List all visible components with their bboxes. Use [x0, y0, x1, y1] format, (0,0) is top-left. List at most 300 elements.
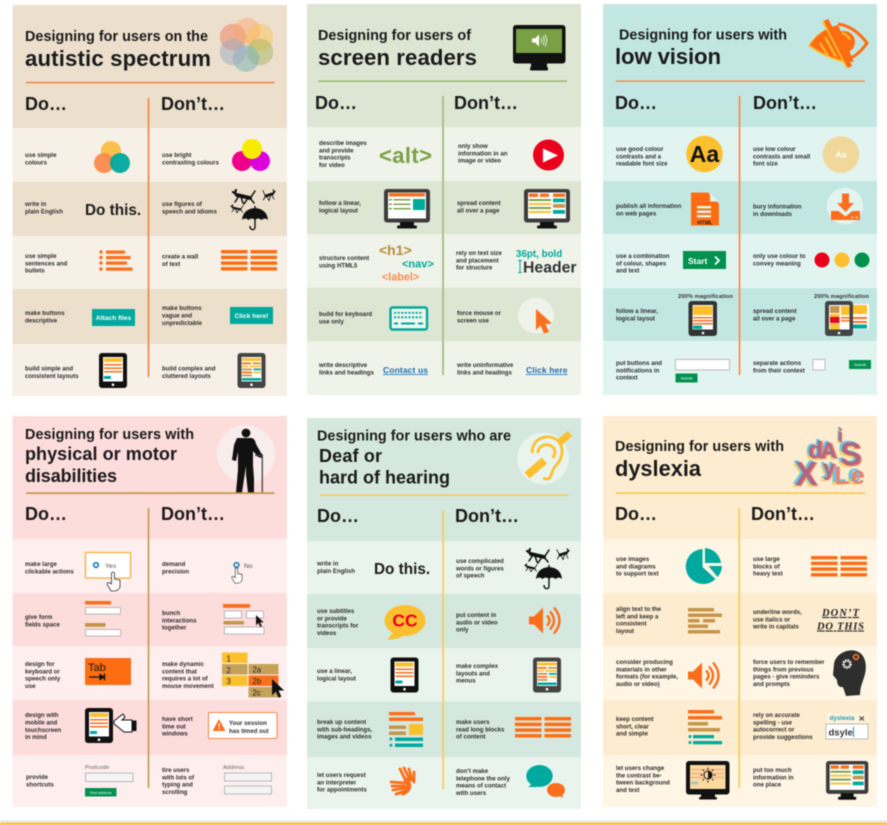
- icon: cluttered monitor: [826, 761, 868, 800]
- icon: wall of text: [515, 717, 571, 738]
- row text: long blocks: make users: [456, 719, 490, 726]
- heading: physical or motor disabilities: physical or motor: [25, 444, 177, 464]
- row text: audio or video only: only: [456, 627, 469, 634]
- row text: other formats: consider producing: [616, 659, 673, 666]
- row text: large blocks: heavy text: [753, 571, 783, 578]
- row text: structure content: structure content: [319, 255, 369, 262]
- row text: build for keyboard: use only: [319, 318, 344, 325]
- row text: change contrast: the contrast be-: [616, 772, 662, 779]
- row text: low contrast: contrasts and small: [753, 153, 811, 160]
- row text: rely on text size: and placement: [456, 257, 499, 264]
- row text: only colour: convey meaning: [753, 260, 801, 267]
- icon: jumbled dyslexia letters: A: [822, 438, 839, 464]
- button: attach files: [92, 309, 135, 326]
- row text: complicated words: words or figures: [455, 565, 504, 572]
- icon: low contrast Aa: [823, 136, 859, 173]
- row text: complex layouts: make complex: [456, 663, 499, 670]
- row text: break up content: with sub-headings,: [316, 726, 372, 733]
- icon: closed caption bubble: CC: [392, 610, 418, 630]
- row text: spread content: spread content: [753, 308, 797, 315]
- heading: deaf or hard of hearing: Deaf or: [319, 446, 382, 466]
- icon: jumbled dyslexia letters: S: [840, 436, 861, 472]
- row text: rely on accurate spelling: provide suggestions: [753, 734, 813, 741]
- row text: follow linear layout: follow a linear,: [616, 308, 658, 315]
- icon: cluttered tablet: [238, 353, 266, 388]
- row text: short timeouts: have short: [162, 716, 193, 723]
- row text: other formats: audio or video): [616, 681, 660, 688]
- row text: interpreter: an interpreter: [317, 779, 357, 786]
- icon: wall of text: [221, 250, 277, 270]
- example: alt tag: <alt>: [379, 143, 432, 168]
- row text: change contrast: and text: [616, 787, 639, 794]
- row text: keyboard or speech: design for: [25, 661, 55, 668]
- row text: mobile and touchscreen: design with: [25, 712, 59, 719]
- row text: images and diagrams: to support text: [616, 571, 659, 578]
- row text: break up content: images and videos: [317, 734, 372, 741]
- icon: html document: [691, 192, 719, 226]
- heading: dyslexia: [615, 439, 784, 481]
- row text: keep content short: and simple: [616, 731, 648, 738]
- row text: too much information: one place: [753, 782, 782, 789]
- icon: jumbled dyslexia letters: y: [824, 456, 837, 481]
- row text: rely on accurate spelling: spelling - use: [753, 719, 793, 726]
- row text: only show information: information in an: [458, 150, 508, 157]
- row text: complex layouts: menus: [456, 678, 476, 685]
- row text: underline italics capitals: use italics or: [753, 616, 791, 623]
- icon: jumbled dyslexia letters: A: [818, 439, 835, 465]
- icon: cluttered tablet: [533, 658, 561, 692]
- menu: nested fly-out: 3: [226, 677, 231, 686]
- heading: do: Do…: [615, 504, 657, 524]
- heading: autistic spectrum: Designing for users on the: [25, 29, 208, 45]
- row text: mobile and touchscreen: touchscreen: [25, 727, 62, 734]
- row text: build for keyboard: build for keyboard: [319, 311, 372, 318]
- icon: bright colour circles: [232, 139, 270, 171]
- row text: long blocks: read long blocks: [456, 726, 505, 733]
- row text: make buttons vague: vague and: [162, 312, 192, 320]
- row text: force users to remember: pages - give reminders: [753, 674, 820, 681]
- row text: spread content: spread content: [457, 200, 501, 207]
- row text: keep content short: keep content: [616, 716, 654, 723]
- row text: subtitles: videos: [317, 630, 337, 637]
- icon: head with gears: [833, 650, 866, 696]
- example: don't do this: DO THIS: [816, 622, 864, 632]
- icon: jumbled dyslexia letters: [792, 424, 865, 495]
- button: start: Start: [688, 256, 708, 266]
- row text: publish on web pages: publish all information: [616, 203, 682, 210]
- row text: good contrast: readable font size: [616, 161, 668, 168]
- heading: don't: Don’t…: [161, 504, 225, 524]
- icon: jumbled dyslexia letters: y: [823, 457, 835, 480]
- row text: short timeouts: windows: [161, 731, 188, 738]
- example: do this: Do this.: [85, 202, 141, 219]
- icon: jumbled dyslexia letters: e: [851, 462, 865, 490]
- icon: left-aligned lines: [688, 608, 722, 634]
- icon: jumbled dyslexia letters: S: [841, 436, 863, 473]
- row text: buttons in context: notifications in: [616, 367, 660, 374]
- row text: write uninformative links: write uninformative: [456, 362, 514, 369]
- row text: use simple sentences and bullets: bullets: [25, 268, 45, 275]
- row text: interpreter: let users request: [317, 772, 366, 779]
- row text: large clickable actions: clickable actions: [25, 568, 74, 575]
- row text: other formats: formats (for example,: [616, 674, 678, 681]
- row text: build simple layouts: build simple and: [25, 366, 73, 372]
- panel: deaf or hard of hearing: [307, 418, 581, 809]
- row text: only show information: image or video: [458, 158, 501, 165]
- heading: deaf or hard of hearing: Designing for users who are: [317, 428, 511, 444]
- icon: wall of text: [811, 556, 867, 576]
- icon: jumbled dyslexia letters: L: [830, 463, 846, 491]
- panel: low vision: [603, 4, 877, 395]
- heading: physical or motor disabilities: Designing for users with: [25, 427, 194, 443]
- heading: do: Do…: [317, 506, 359, 526]
- row text: audio or video only: audio or video: [456, 619, 498, 626]
- row text: change contrast: let users change: [616, 765, 665, 772]
- example: don't do this: [816, 608, 864, 632]
- menu: nested fly-out: 1: [226, 654, 231, 664]
- icon: jumbled dyslexia letters: d: [810, 437, 825, 465]
- row text: tire users: with lots of: [161, 774, 195, 781]
- row text: build simple layouts: consistent layouts: [25, 373, 79, 380]
- icon: person with cane: [217, 425, 275, 492]
- row text: combination of colour: and text: [616, 268, 639, 275]
- row text: large clickable actions: make large: [25, 561, 57, 568]
- button: click here: Click here!: [235, 313, 268, 320]
- row text: telephone: don’t make: [456, 768, 489, 775]
- row text: rely on text size: for structure: [456, 265, 493, 272]
- alert: session timed out: Your session: [229, 720, 267, 727]
- heading: don't: Don’t…: [454, 93, 518, 113]
- row text: spread content: all over a page: [753, 315, 796, 322]
- row text: force users to remember: things from previous: [753, 666, 814, 673]
- row text: force mouse: force mouse or: [457, 310, 502, 317]
- row text: make buttons descriptive: descriptive: [25, 318, 58, 324]
- row text: audio or video only: put content in: [456, 612, 497, 619]
- panel: physical or motor disabilities: [12, 416, 287, 807]
- form: separated submit: Submit: [854, 363, 867, 367]
- icon: simple tablet: [390, 658, 418, 692]
- row text: force users to remember: force users to remember: [753, 659, 825, 666]
- row text: keyboard or speech: keyboard or: [25, 668, 61, 675]
- icon: contrast monitor: [686, 761, 730, 800]
- icon: speaker: [688, 662, 718, 688]
- row text: combination of colour: of colour, shapes: [616, 260, 667, 267]
- row text: write in plain English: write in: [24, 201, 47, 208]
- row text: make buttons vague: unpredictable: [162, 320, 203, 327]
- icon: speaker: [529, 608, 560, 634]
- row text: keyboard or speech: use: [25, 683, 36, 690]
- row text: form fields space: fields space: [25, 621, 60, 628]
- icon: jumbled dyslexia letters: d: [806, 438, 821, 466]
- heading: low vision: [615, 28, 787, 69]
- row text: change contrast: tween background: [616, 780, 670, 787]
- row text: linear layout: logical layout: [317, 675, 356, 682]
- icon: jumbled dyslexia letters: A: [818, 436, 835, 462]
- icon: keyboard: [390, 308, 427, 330]
- row text: tire users: scrolling: [162, 789, 188, 796]
- form: postcode lookup: [85, 765, 133, 796]
- row text: bunch interactions: interactions: [162, 617, 197, 624]
- control: small radio no: [232, 563, 253, 583]
- icon: html document: HTML: [697, 220, 713, 226]
- row text: force mouse: screen use: [457, 317, 489, 324]
- row text: complex layouts: layouts and: [456, 670, 490, 677]
- row text: subtitles: or provide: [317, 615, 347, 622]
- icon: structured content: [389, 712, 423, 747]
- heading: do: Do…: [615, 93, 657, 113]
- icon: pie chart: [686, 548, 722, 584]
- icon: linear monitor: [384, 189, 430, 228]
- heading: screen readers: [318, 28, 477, 70]
- alert: session timed out: [208, 712, 277, 738]
- row text: underline italics capitals: write in capitals: [752, 624, 799, 631]
- row text: use figures of speech: speech and idioms: [162, 208, 217, 216]
- icon: signing hands: [391, 768, 414, 794]
- menu: nested fly-out: [222, 652, 284, 698]
- row text: rely on text size: rely on text size: [456, 250, 502, 257]
- heading: don't: Don’t…: [751, 504, 815, 524]
- row text: other formats: materials in other: [616, 666, 667, 673]
- heading: don't: Don’t…: [161, 94, 225, 114]
- row text: too much information: put too much: [753, 767, 792, 774]
- row text: make buttons vague: make buttons: [162, 305, 202, 312]
- row text: describe images: and provide: [319, 147, 354, 154]
- row text: subtitles: transcripts for: [317, 623, 359, 630]
- icon: hearing loss ear: [517, 433, 570, 484]
- row text: break up content: break up content: [317, 719, 366, 726]
- form: input with submit: [676, 360, 730, 382]
- icon: jumbled dyslexia letters: e: [847, 463, 861, 491]
- row text: interpreter: for appointments: [317, 787, 367, 794]
- row text: align text left: left and keep a: [616, 613, 659, 620]
- row text: telephone: means of contact: [456, 783, 506, 790]
- row text: align text left: layout: [616, 628, 634, 635]
- heading: dyslexia: dyslexia: [615, 456, 702, 481]
- link: click here: Click here: [526, 365, 568, 375]
- form: postcode lookup: Find address: [90, 791, 112, 795]
- row text: dynamic content: content that: [162, 668, 197, 675]
- example: autocorrect field: dyslexia: [830, 715, 855, 722]
- row text: mobile and touchscreen: mobile and: [25, 720, 57, 726]
- row text: too much information: information in: [753, 774, 794, 781]
- row text: follow a linear layout: logical layout: [319, 207, 358, 214]
- row text: demand precision: demand: [162, 561, 186, 568]
- row text: large blocks: use large: [753, 556, 780, 563]
- row text: describe images: describe images: [319, 140, 367, 147]
- icon: chat bubbles: [526, 765, 565, 798]
- example: styled header: Header: [523, 260, 577, 276]
- control: small radio no: No: [244, 563, 253, 570]
- icon: jumbled dyslexia letters: X: [795, 455, 817, 492]
- icon: raining cats and dogs: [525, 549, 569, 589]
- row text: keyboard or speech: speech only: [25, 676, 61, 683]
- heading: deaf or hard of hearing: hard of hearing: [319, 468, 450, 488]
- row text: use simple sentences and bullets: sentences and: [25, 260, 68, 267]
- form: spaced fields: [85, 601, 120, 636]
- row text: describe images: for video: [319, 162, 345, 169]
- example: html tags: <h1>: [379, 242, 412, 258]
- row text: write descriptive links: write descriptive: [318, 362, 368, 369]
- row text: only colour: only use colour to: [753, 253, 806, 260]
- example: html tags: [379, 242, 434, 284]
- row text: use simple colours: colours: [25, 160, 48, 166]
- row text: build complex layouts: build complex and: [162, 366, 216, 372]
- heading: do: Do…: [25, 94, 67, 114]
- icon: jumbled dyslexia letters: i: [836, 428, 841, 448]
- row text: separate actions: separate actions: [753, 360, 802, 367]
- heading: don't: Don’t…: [753, 93, 817, 113]
- example: don't do this: DON’T: [821, 608, 860, 619]
- row text: use figures of speech: use figures of: [162, 201, 203, 208]
- row text: force users to remember: and prompts: [753, 681, 791, 688]
- row text: buttons in context: context: [616, 375, 638, 382]
- row text: write in plain English: write in: [316, 560, 339, 568]
- example: autocorrect field: dsyle: [828, 728, 853, 738]
- row text: good contrast: use good colour: [616, 146, 664, 153]
- form: input with submit: Submit: [681, 377, 693, 381]
- icon: video play: [533, 140, 564, 170]
- row text: combination of colour: use a combination: [616, 253, 670, 260]
- icon: simple tablet: [99, 353, 127, 388]
- icon: high contrast Aa: [686, 136, 723, 172]
- row text: describe images: transcripts: [319, 155, 351, 162]
- alert: session timed out: has timed out: [229, 728, 269, 735]
- icon: short content bars: [688, 710, 722, 744]
- heading: low vision: low vision: [615, 44, 721, 69]
- panel: dyslexia: [603, 416, 877, 807]
- example: styled header: [516, 249, 577, 276]
- row text: dynamic content: requires a lot of: [162, 676, 209, 683]
- icon: monitor with speaker: [513, 25, 566, 70]
- label: 200% magnification: 200% magnification: [678, 294, 734, 300]
- row text: rely on accurate spelling: rely on accurate: [753, 712, 800, 719]
- row text: form fields space: give form: [25, 614, 53, 621]
- row text: low contrast: font size: [753, 161, 778, 168]
- example: do this: Do this.: [374, 561, 430, 578]
- icon: crossed-out eye: [808, 20, 867, 67]
- row text: create a wall of text: of text: [162, 261, 180, 268]
- row text: align text left: align text to the: [616, 606, 662, 613]
- heading: do: Do…: [25, 504, 67, 524]
- row text: tire users: tire users: [162, 767, 190, 774]
- row text: bury in downloads: bury information: [753, 204, 802, 210]
- icon: jumbled dyslexia letters: i: [838, 426, 843, 446]
- row text: write in plain English: plain English: [25, 208, 63, 216]
- row text: dynamic content: mouse movement: [162, 683, 214, 690]
- icon: closed caption bubble: [384, 605, 426, 640]
- row text: buttons in context: put buttons and: [616, 360, 662, 367]
- row text: align text left: consistent: [616, 621, 646, 628]
- row text: rely on accurate spelling: autocorrect or: [753, 727, 795, 734]
- icon: jumbled dyslexia letters: d: [806, 435, 821, 463]
- menu: nested fly-out: 2a: [252, 666, 262, 674]
- menu: nested fly-out: 2c: [252, 688, 261, 698]
- row text: publish on web pages: on web pages: [616, 210, 657, 218]
- row text: large blocks: blocks of: [753, 563, 781, 570]
- icon: high contrast Aa: Aa: [690, 141, 719, 167]
- row text: separate actions: from their context: [753, 367, 805, 374]
- heading: physical or motor disabilities: disabilities: [25, 466, 117, 486]
- panel: autistic spectrum: [12, 5, 287, 396]
- icon: jumbled dyslexia letters: L: [831, 460, 846, 488]
- icon: jumbled dyslexia letters: X: [792, 457, 815, 495]
- icon: bullet list: [99, 250, 132, 271]
- row text: bury in downloads: in downloads: [753, 211, 793, 218]
- icon: jumbled dyslexia letters: i: [838, 426, 844, 446]
- heading: screen readers: screen readers: [318, 45, 477, 70]
- control: large radio yes: [86, 552, 130, 591]
- heading: autistic spectrum: autistic spectrum: [25, 46, 211, 71]
- row text: long blocks: of content: [456, 734, 485, 741]
- icon: jumbled dyslexia letters: X: [796, 456, 819, 494]
- button: attach files: Attach files: [96, 315, 132, 322]
- row text: use bright contrasting colours: contrasting colours: [162, 160, 219, 166]
- row text: bunch interactions: together: [162, 625, 187, 632]
- row text: complicated words: of speech: [456, 573, 485, 580]
- icon: overlapping colour petals: [220, 18, 273, 72]
- row text: follow linear layout: logical layout: [616, 315, 655, 322]
- row text: provide shortcuts: provide: [26, 774, 49, 781]
- icon: traffic light circles: [814, 252, 870, 268]
- row text: bunch interactions: bunch: [162, 610, 181, 617]
- key: tab: [85, 658, 131, 685]
- row text: structure content: using HTML5: [319, 262, 358, 269]
- row text: make buttons descriptive: make buttons: [25, 310, 65, 317]
- icon: low contrast Aa: Aa: [836, 150, 847, 160]
- icon: jumbled dyslexia letters: S: [837, 437, 859, 474]
- icon: jumbled dyslexia letters: y: [820, 454, 834, 479]
- row text: telephone: telephone the only: [456, 775, 510, 782]
- row text: telephone: with users: [455, 790, 487, 797]
- icon: magnified cluttered tablet: [825, 301, 869, 336]
- row text: good contrast: contrasts and a: [616, 153, 662, 160]
- icon: jumbled dyslexia letters: d: [808, 437, 823, 464]
- row text: write descriptive links: links and headings: [319, 369, 374, 376]
- row text: write uninformative links: links and headings: [457, 369, 512, 376]
- key: tab: Tab: [88, 662, 106, 674]
- row text: provide shortcuts: shortcuts: [26, 781, 54, 788]
- heading: deaf or hard of hearing: [317, 428, 511, 488]
- form: bunched fields: [223, 604, 264, 634]
- icon: jumbled dyslexia letters: X: [792, 454, 816, 492]
- icon: download: [827, 188, 863, 224]
- icon: jumbled dyslexia letters: i: [836, 424, 842, 444]
- row text: use simple sentences and bullets: use simple: [25, 253, 57, 260]
- icon: simple colour circles: [94, 141, 130, 173]
- icon: scattered monitor: [524, 189, 570, 228]
- row text: linear layout: use a linear,: [317, 668, 352, 675]
- row text: subtitles: use subtitles: [317, 608, 355, 615]
- row text: only show information: only show: [458, 143, 488, 150]
- row text: mobile and touchscreen: in mind: [25, 734, 47, 741]
- icon: jumbled dyslexia letters: e: [848, 460, 862, 488]
- row text: images and diagrams: use images: [616, 556, 650, 563]
- heading: autistic spectrum: [25, 29, 211, 71]
- row text: images and diagrams: and diagrams: [616, 563, 656, 570]
- control: large radio yes: Yes: [105, 563, 117, 570]
- row text: spread content: all over a page: [457, 207, 500, 214]
- row text: complicated words: use complicated: [456, 558, 504, 565]
- row text: keep content short: short, clear: [616, 723, 649, 730]
- heading: dyslexia: Designing for users with: [615, 439, 784, 455]
- button: click here: [230, 307, 273, 324]
- example: html tags: <nav>: [402, 258, 434, 270]
- heading: do: Do…: [315, 93, 357, 113]
- example: autocorrect field: [826, 712, 868, 739]
- row text: follow a linear layout: follow a linear,: [319, 200, 361, 207]
- row text: underline italics capitals: underline words,: [753, 609, 802, 616]
- form: long address: Address: [223, 765, 244, 771]
